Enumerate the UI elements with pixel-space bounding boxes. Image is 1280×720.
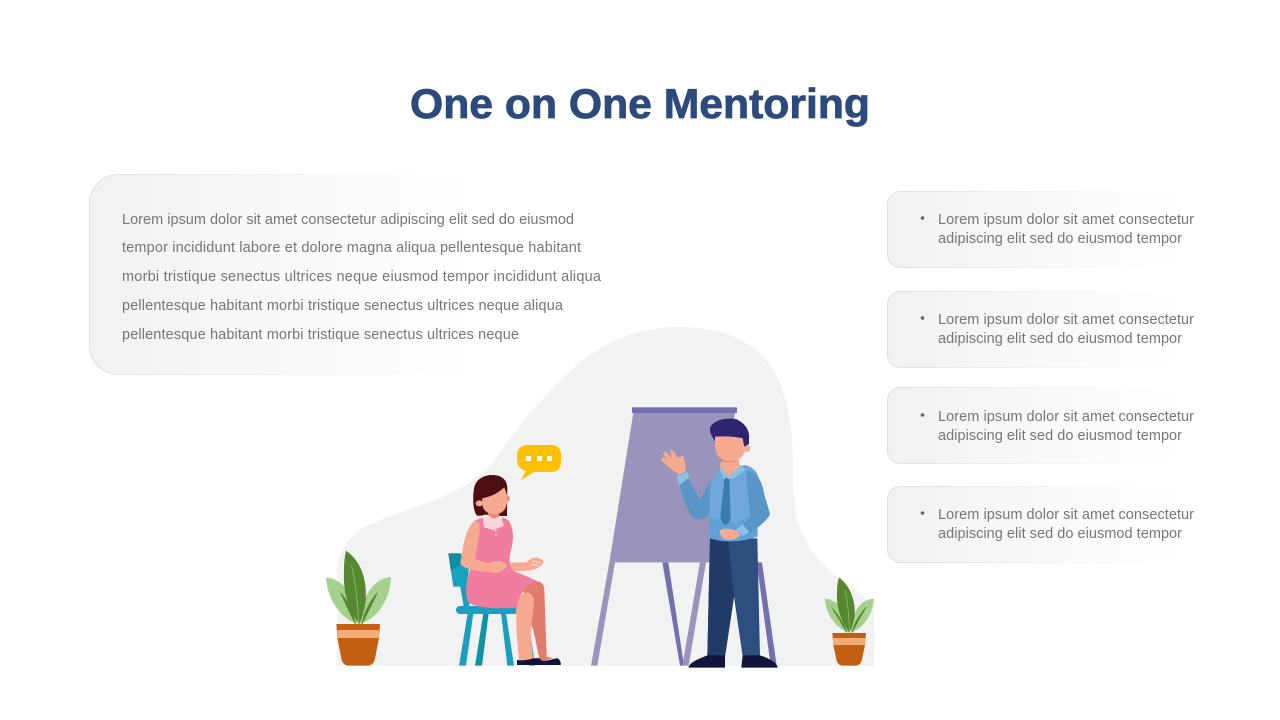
hand wave	[661, 450, 686, 475]
near arm	[460, 521, 507, 573]
icon: right potted plant	[825, 577, 874, 666]
chair	[448, 553, 535, 666]
panel: bullet 4: Lorem ipsum dolor sit amet consectetur	[938, 507, 1194, 523]
background blob	[337, 327, 874, 666]
panel: bullet 2: Lorem ipsum dolor sit amet consectetur	[938, 312, 1194, 328]
shirt	[708, 465, 758, 541]
shoes	[537, 658, 561, 665]
text block: intro paragraph: morbi tristique senectus ultrices neque eiusmod tempor incididunt aliqua	[122, 269, 602, 285]
text block: intro paragraph	[122, 212, 602, 343]
panel: bullet 3: adipiscing elit sed do eiusmod tempor	[938, 428, 1182, 444]
far arm	[507, 558, 543, 571]
illustration: flip chart	[591, 407, 777, 666]
shoes	[688, 655, 725, 668]
illustration: woman on chair	[448, 475, 561, 666]
panel: intro text	[90, 174, 602, 374]
face	[715, 436, 745, 461]
text block: intro paragraph: pellentesque habitant morbi tristique senectus ultrices neque	[122, 327, 519, 343]
panel: bullet 2	[888, 292, 1198, 368]
hair	[710, 419, 749, 447]
clasped hands	[719, 529, 741, 540]
ear	[743, 445, 750, 452]
panel: bullet 3	[888, 388, 1198, 464]
panel: bullet 3: Lorem ipsum dolor sit amet consectetur	[938, 409, 1194, 425]
panel: bullet 1: Lorem ipsum dolor sit amet consectetur	[938, 212, 1194, 228]
text block: intro paragraph: Lorem ipsum dolor sit amet consectetur adipiscing elit sed do eiusmod	[122, 212, 574, 228]
tie	[720, 476, 731, 525]
hair	[473, 475, 507, 516]
near leg	[516, 592, 534, 661]
icon: speech bubble	[517, 445, 561, 480]
text block: intro paragraph: tempor incididunt labore et dolore magna aliqua pellentesque habitant	[122, 240, 581, 256]
far leg	[523, 581, 553, 662]
face	[482, 487, 507, 514]
text block: intro paragraph: pellentesque habitant morbi tristique senectus ultrices neque aliqua	[122, 298, 564, 314]
trousers	[707, 538, 760, 657]
title: One on One Mentoring	[410, 80, 870, 127]
neck and collar	[720, 457, 740, 479]
panel: bullet 2: adipiscing elit sed do eiusmod tempor	[938, 331, 1182, 347]
collar	[483, 517, 504, 530]
raised arm	[679, 477, 711, 519]
illustration: man presenting	[661, 419, 778, 668]
icon: left potted plant	[326, 551, 391, 666]
neck	[488, 512, 499, 519]
dress	[466, 517, 537, 608]
far arm	[739, 471, 770, 535]
panel: bullet 1: adipiscing elit sed do eiusmod tempor	[938, 231, 1182, 247]
panel: bullet 4: adipiscing elit sed do eiusmod tempor	[938, 526, 1182, 542]
panel: bullet 4	[888, 486, 1198, 562]
panel: bullet 1	[888, 192, 1198, 268]
